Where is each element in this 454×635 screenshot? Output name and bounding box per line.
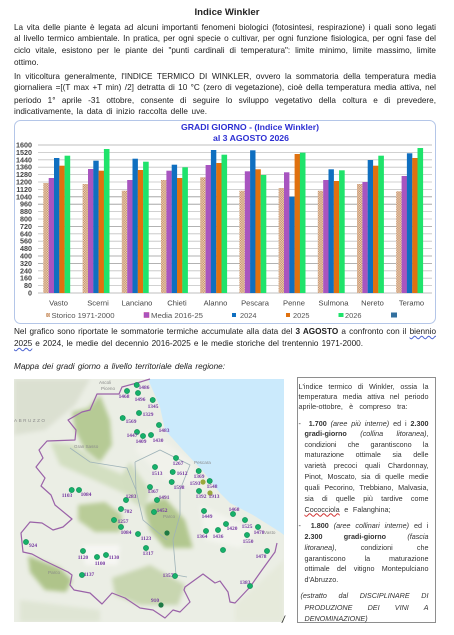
- map stations: values: [29, 385, 267, 604]
- text block: chart note: 2025 e 2024, le medie del decennio 2016-2025 e le medie storiche del trentennio 1971-2000.: [14, 339, 363, 348]
- y axis labels: 1360: [16, 163, 32, 172]
- category labels: Alanno: [204, 298, 227, 308]
- map stations: values: 1513: [152, 471, 163, 477]
- map stations: values: 1120: [78, 555, 89, 561]
- chart legend: Storico 1971-2000: [52, 311, 114, 320]
- category labels: Chieti: [167, 298, 187, 308]
- map stations: values: 924: [29, 543, 37, 549]
- map stations: values: 1369: [194, 474, 205, 480]
- callout item: 1700: Pinot, Moscato, sia di quelle medie: [304, 472, 428, 480]
- y axis labels: 1280: [16, 170, 32, 179]
- category labels: Vasto: [49, 298, 68, 308]
- callout item: 1700: sia di quelle più tardive come: [304, 494, 428, 502]
- callout item: 1700: [298, 418, 428, 517]
- map: gradi giorno by territory: [14, 378, 286, 626]
- category labels: [49, 298, 424, 308]
- chart frame: [14, 120, 436, 324]
- chart legend: 2025: [293, 311, 309, 320]
- map stations: values: 1283: [126, 494, 137, 500]
- map stations: values: 1548: [207, 484, 218, 490]
- category labels: Scerni: [87, 298, 109, 308]
- y axis labels: 480: [20, 244, 32, 253]
- category labels: Pescara: [241, 298, 270, 308]
- map labels: place names: Ascoli: [99, 380, 111, 385]
- map stations: values: 1364: [197, 534, 208, 540]
- y axis labels: 960: [20, 200, 32, 209]
- map stations: values: 1123: [141, 536, 152, 542]
- map stations: values: 1137: [84, 572, 95, 578]
- callout intro: aprile-ottobre, è compreso tra:: [298, 402, 408, 410]
- map caption: Mappa dei gradi giorno a livello territoriale della regione:: [14, 362, 225, 371]
- map stations: values: 1257: [118, 519, 129, 525]
- map stations: values: 1569: [126, 419, 137, 425]
- callout item: 1700: Cococciola e Falanghina;: [304, 504, 390, 514]
- text block: Winkler definition paragraph: In viticoltura generalmente, l'INDICE TERMICO DI WINKLER, ovvero la sommatoria della temperatura media: [14, 72, 436, 81]
- category labels: Sulmona: [319, 298, 349, 308]
- y axis labels: 240: [20, 266, 32, 275]
- map stations: values: 1329: [143, 412, 154, 418]
- map labels: place names: Piceno: [101, 386, 115, 391]
- chart heading: al 3 AGOSTO 2026: [213, 134, 289, 143]
- map labels: place names: Gran Sasso: [74, 444, 99, 449]
- map stations: values: 1483: [159, 428, 170, 434]
- y axis labels: 640: [20, 229, 32, 238]
- bars: Teramo: [396, 148, 423, 293]
- chart legend: 2024: [240, 311, 256, 320]
- map stations: values: 1409: [136, 439, 147, 445]
- bar chart: gradi giorno: [14, 120, 436, 324]
- y axis labels: 560: [20, 237, 32, 246]
- callout item: 1800: ottimale del vitigno Montepulciano: [304, 564, 428, 572]
- map stations: values: 1491: [159, 495, 170, 501]
- map stations: values: 702: [124, 509, 132, 515]
- callout item: 1700: - 1.700 (aree più interne) ed i 2.300: [298, 418, 428, 428]
- map stations: values: 1100: [95, 561, 106, 567]
- map stations: values: 1452: [157, 508, 168, 514]
- map stations: values: 1267: [173, 461, 184, 467]
- map stations: values: 1913: [209, 494, 220, 500]
- y axis labels: 800: [20, 214, 32, 224]
- map stations: values: 1084: [121, 530, 132, 536]
- text block: intro paragraph: al livello termico ambientale. In pratica, per ogni specie o cultivar, per ogni funzione fisiologica, per ogni fase del: [14, 34, 436, 43]
- chart heading: GRADI GIORNO - (Indice Winkler): [181, 123, 319, 132]
- text block: intro paragraph: [14, 23, 436, 67]
- map stations: values: 1103: [62, 493, 73, 499]
- map stations: values: 1367: [148, 489, 159, 495]
- callout source note: DENOMINAZIONE): [304, 614, 368, 622]
- y axis labels: 400: [20, 252, 32, 260]
- y axis labels: 0: [28, 288, 32, 298]
- y axis labels: 880: [20, 207, 32, 216]
- map stations: values: 1486: [139, 385, 150, 391]
- callout item: 1700: condizioni che garantiscono la: [304, 440, 428, 448]
- callout source note: PRODUZIONE DEI VINI A: [304, 602, 428, 612]
- text block: intro paragraph: La vita delle piante è legata ad alcuni importanti fenomeni biologici (fotosintesi, respirazione) i quali sono legati: [14, 23, 436, 32]
- map stations: values: 1478: [254, 530, 265, 536]
- callout item: 1700: gradi-giorno (collina litoranea),: [304, 428, 428, 438]
- panel: Winkler index callout: [296, 376, 436, 623]
- text block: Winkler definition paragraph: indicativamente, la data di inizio raccolta delle uve.: [14, 107, 207, 116]
- text block: Winkler definition paragraph: [14, 72, 436, 116]
- bars: Lanciano: [122, 159, 149, 293]
- y axis labels: 1040: [16, 192, 32, 201]
- chart legend: [46, 311, 397, 320]
- callout source note: (estratto dal DISCIPLINARE DI: [300, 590, 428, 600]
- bars: Sulmona: [318, 169, 345, 293]
- map labels: place names: Pescara: [194, 460, 211, 465]
- bars: Nereto: [357, 156, 384, 293]
- y axis labels: 1440: [16, 155, 32, 164]
- callout source note: [300, 590, 428, 622]
- stray slash mark: /: [281, 615, 286, 626]
- callout intro: L'indice termico di Winkler, ossia la: [298, 382, 428, 390]
- callout item: 1800: - 1.800 (aree collinari interne) ed i: [298, 520, 429, 530]
- bars: Pescara: [239, 150, 266, 293]
- map stations: values: 1525: [242, 524, 253, 530]
- chart legend: 2026: [345, 311, 361, 320]
- y axis labels: 1200: [16, 178, 32, 186]
- map stations: values: 1478: [256, 554, 267, 560]
- y axis labels: 1120: [16, 185, 32, 194]
- y axis labels: 1520: [16, 148, 32, 157]
- map stations: values: 910: [151, 598, 159, 604]
- map stations: values: 1550: [243, 539, 254, 545]
- rivers: [70, 448, 190, 577]
- map stations: values: 1593: [190, 481, 201, 487]
- callout item: 1800: d'Abruzzo.: [304, 574, 338, 584]
- map stations: values: 1420: [227, 526, 238, 532]
- text block: intro paragraph: ottimo.: [14, 58, 39, 67]
- map stations: values: 1392: [196, 494, 207, 500]
- map labels: place names: ABRUZZO: [14, 418, 46, 423]
- y axis labels: 1600: [16, 140, 32, 150]
- chart legend: Media 2016-25: [151, 311, 203, 320]
- bars: Penne: [279, 153, 306, 293]
- bars: Chieti: [161, 165, 188, 293]
- map stations: values: 1496: [135, 397, 146, 403]
- map stations: values: 1130: [109, 555, 120, 561]
- map labels: place names: Parco: [48, 570, 60, 575]
- map stations: values: 1436: [213, 534, 224, 540]
- callout item: 1800: 2.300 gradi-giorno (fascia: [304, 532, 428, 540]
- sea: [148, 379, 284, 535]
- y axis labels: 80: [24, 281, 32, 290]
- callout intro: temperatura media attiva nel periodo: [298, 392, 428, 400]
- bars: Scerni: [83, 149, 110, 293]
- text block: intro paragraph: ciclo vitale, esistono per le piante dei "punti cardinali di temperatura": limite minimo, limite massimo, limite: [14, 46, 436, 55]
- chart heading: [181, 123, 319, 143]
- map stations: values: 1317: [143, 551, 154, 557]
- callout item: 1800: litoranea), condizioni che: [304, 542, 428, 552]
- callout item: 1700: maturazione ottimale sia delle: [304, 450, 428, 458]
- callout item: 1700: quali Pecorino, Trebbiano, Malvasia,: [304, 482, 428, 492]
- y axis labels: 720: [20, 222, 32, 231]
- map stations: values: 1383: [240, 580, 251, 586]
- bars: Vasto: [43, 156, 70, 293]
- category labels: Lanciano: [122, 298, 152, 308]
- map labels: place names: Parco: [163, 514, 175, 519]
- y axis labels: [16, 140, 32, 298]
- map labels: place names: Vasto: [264, 530, 276, 535]
- category labels: Nereto: [361, 298, 384, 308]
- callout item: 1700: varietà precoci quali Chardonnay,: [304, 460, 428, 470]
- map stations: values: 1598: [174, 485, 185, 491]
- callout item: 1800: [298, 520, 429, 584]
- map stations: values: 1430: [153, 438, 164, 444]
- y axis labels: 160: [20, 274, 32, 283]
- y axis labels: 320: [20, 259, 32, 268]
- terrain and sea: [14, 379, 284, 622]
- text block: Winkler definition paragraph: periodo 1° aprile -31 ottobre, consente di seguire lo sviluppo vegetativo della coltura e di prevedere,: [14, 96, 436, 105]
- text block: chart note: [14, 327, 436, 352]
- category labels: Penne: [283, 298, 305, 308]
- map stations: dots: [23, 382, 270, 608]
- text block: Winkler definition paragraph: giornaliera =[(T max +T min) /2] detratta di 10 °C (zero di vegetazione), cioè della temperatura media attiva, nel: [14, 83, 436, 92]
- category labels: Teramo: [399, 298, 424, 308]
- map stations: values: 1447: [127, 433, 138, 439]
- map stations: values: 1468: [119, 394, 130, 400]
- bars: Alanno: [200, 150, 227, 293]
- text block: chart note: Nel grafico sono riportate le sommatorie termiche accumulate alla data del 3 AGOSTO a confronto con il biennio: [14, 327, 436, 336]
- map stations: values: 1612: [177, 471, 188, 477]
- map stations: values: 1084: [81, 492, 92, 498]
- map stations: values: 1357: [163, 573, 174, 579]
- map stations: values: 1449: [202, 514, 213, 520]
- region boundary: [21, 379, 277, 618]
- title: Indice Winkler: [195, 7, 259, 18]
- map stations: values: 1345: [148, 404, 159, 410]
- map stations: values: 1468: [229, 507, 240, 513]
- callout item: 1800: garantiscono la maturazione: [304, 554, 428, 562]
- map labels: place names: [14, 380, 276, 575]
- callout intro: [298, 382, 428, 410]
